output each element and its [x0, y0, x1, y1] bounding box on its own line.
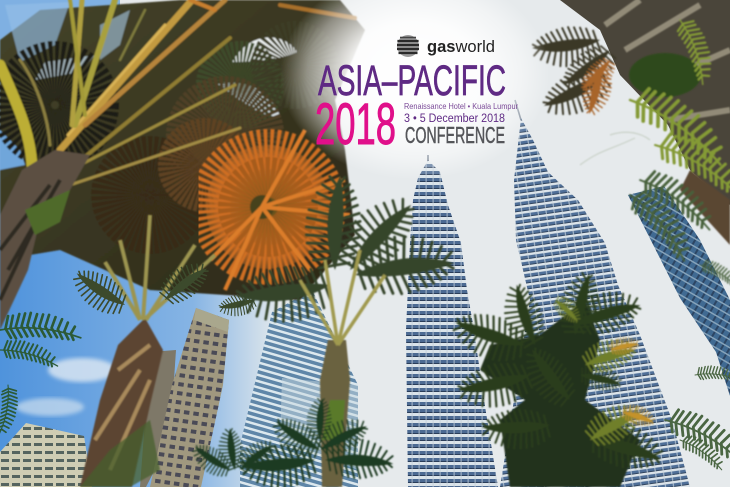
- ferns: dark green: [615, 168, 730, 287]
- title: 2018: 2018: [315, 92, 396, 157]
- fern: lower right corner: [661, 359, 730, 470]
- tower: left Petronas tower: [406, 155, 498, 487]
- foliage: upper right palm and ferns: [530, 0, 730, 287]
- building: right-edge skyscraper: [628, 186, 730, 396]
- logo: gasworld: [397, 35, 495, 57]
- wordmark: gasworld: [427, 37, 495, 56]
- fronds: dark green: [448, 270, 667, 474]
- ferns: bright green: [620, 14, 730, 193]
- fronds: yellow green: [550, 293, 647, 453]
- trunk: upper right palm: [560, 0, 730, 205]
- fronds: left-edge fern: [0, 299, 81, 435]
- fans: dark radial leaves: [21, 71, 89, 139]
- text: dates: 3 • 5 December 2018: [404, 113, 505, 125]
- title: Asia-Pacific: ASIA–PACIFIC: [318, 57, 506, 105]
- background: blue sky at lower left: [0, 0, 275, 487]
- palm: central slim palm: [187, 176, 458, 487]
- sky gaps through canopy: [232, 37, 297, 62]
- frond: orange accents: [576, 53, 619, 117]
- icon: striped gas globe: [397, 35, 419, 57]
- fronds: crown of central palm: [233, 176, 458, 330]
- fronds: long golden leaf stems: [0, 0, 355, 185]
- building: hotel tower: [140, 308, 229, 487]
- building: glass office tower: [240, 290, 358, 487]
- frond: small palm in upper right: [530, 22, 621, 127]
- glow: white flare behind title: [280, 0, 550, 180]
- building: apartment block: [0, 423, 92, 487]
- canopy: upper left palm mass: [0, 0, 365, 330]
- trunk: middle-left palm: [80, 215, 215, 487]
- fan: orange palm leaf: [206, 130, 350, 290]
- fronds: orange tips: [608, 334, 657, 429]
- text: conference: CONFERENCE: [405, 122, 505, 148]
- fronds: low palm at bottom: [187, 398, 393, 487]
- text: venue: Renaissance Hotel • Kuala Lumpur: [404, 101, 518, 111]
- tower: right Petronas tower: [500, 100, 690, 487]
- palm cluster: right foreground: [448, 270, 667, 487]
- fronds: spiky fronds of middle-left palm: [66, 254, 258, 320]
- trunk: upper left palm crown: [0, 150, 90, 330]
- mass: dark foliage: [480, 300, 640, 487]
